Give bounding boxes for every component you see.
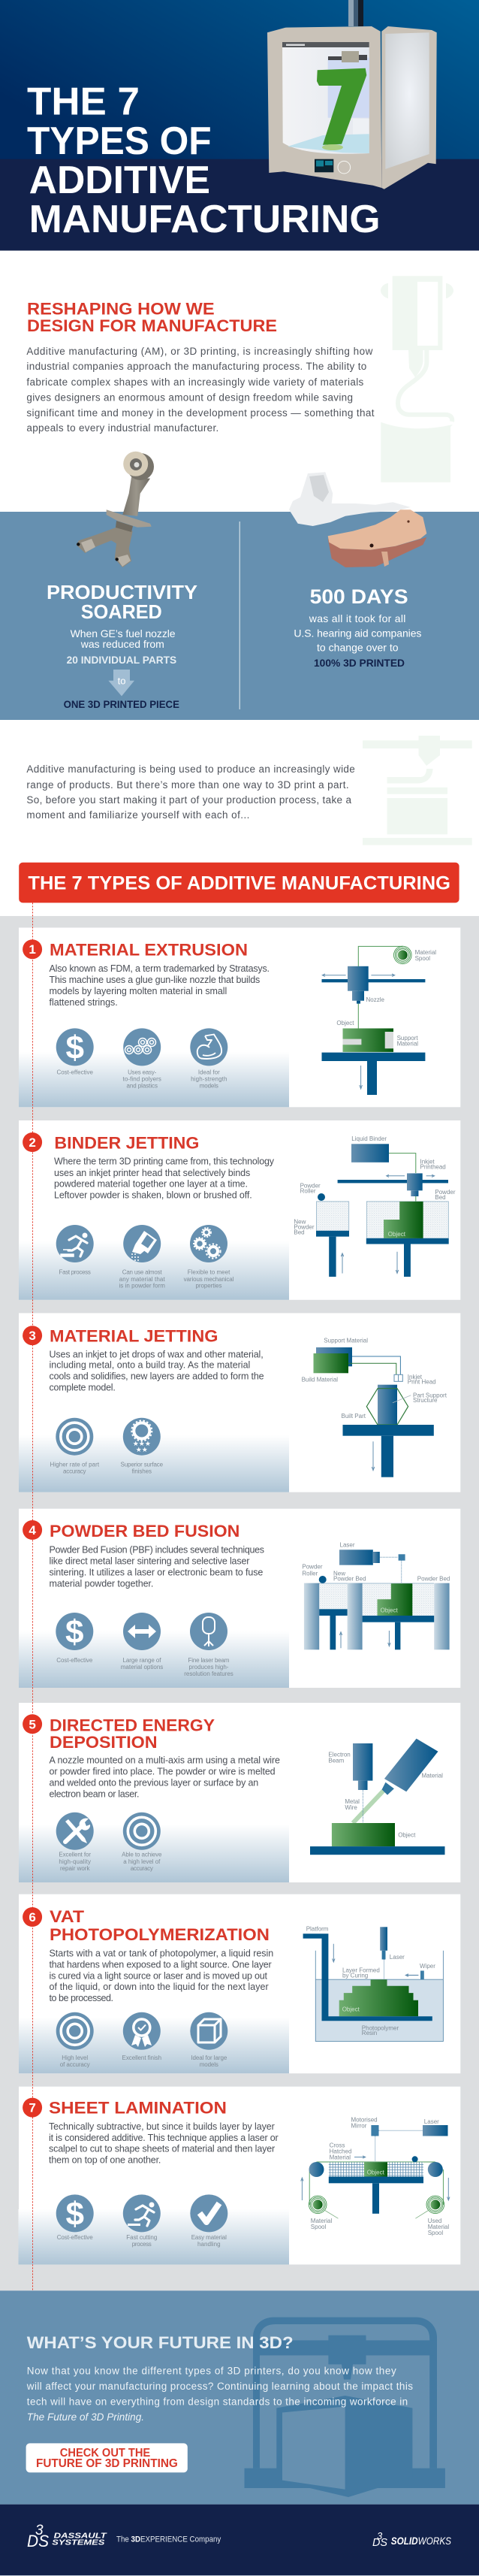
description: powdered material together one layer at a time. xyxy=(54,1179,248,1190)
logo: Dassault Systemes xyxy=(27,2523,108,2550)
number badges xyxy=(23,939,42,2118)
diagram: sheet lamination: Motorised xyxy=(351,2117,378,2124)
diagram: material extrusion: Material xyxy=(415,949,436,956)
icon labels: Fast process xyxy=(59,1269,91,1276)
number badges: 2 xyxy=(29,1135,36,1150)
title: MATERIAL JETTING xyxy=(50,1326,218,1345)
intro paragraph: fabricate complex shapes with an increasingly wide variety of materials xyxy=(26,376,364,388)
text: 500 days xyxy=(294,585,421,669)
text: productivity soared: was reduced from xyxy=(80,638,164,650)
icon labels: Higher rate of part xyxy=(50,1462,100,1468)
diagram: material extrusion: Material xyxy=(397,1040,418,1047)
icon: dollar: $ xyxy=(65,1614,84,1651)
paragraph: The Future of 3D Printing. xyxy=(27,2411,144,2423)
icon labels xyxy=(60,2054,227,2068)
text: 500 days: 500 DAYS xyxy=(310,585,408,608)
icon: laser beam xyxy=(190,1613,227,1650)
description: Uses an inkjet to jet drops of wax and other material, xyxy=(50,1349,264,1359)
icon labels: accuracy xyxy=(63,1468,86,1475)
button: FUTURE OF 3D PRINTING xyxy=(36,2457,178,2470)
logo: SolidWorks: 3 xyxy=(377,2530,383,2541)
description: that hardens when exposed to a light source. One layer xyxy=(50,1960,272,1970)
logo: Dassault Systemes: DASSAULT xyxy=(54,2531,108,2540)
description: Powder Bed Fusion (PBF) includes several techniques xyxy=(50,1545,264,1556)
title: MANUFACTURING xyxy=(29,198,381,241)
description: This machine uses a glue gun-like nozzle that builds xyxy=(50,975,260,985)
icon labels: high-quality xyxy=(59,1858,91,1865)
icon: muscle xyxy=(190,1028,227,1066)
diagram: directed energy deposition: Object xyxy=(398,1832,416,1839)
diagram: material jetting: Inkjet xyxy=(408,1374,423,1380)
icon labels: Ideal for xyxy=(198,1069,220,1076)
title xyxy=(27,80,381,241)
diagram: sheet lamination: Hatched xyxy=(330,2148,351,2154)
description: is cured via a light source or laser and is moved up out xyxy=(50,1970,268,1981)
text: 500 days: U.S. hearing aid companies xyxy=(294,627,421,639)
number badges: 6 xyxy=(29,1910,36,1924)
title: PHOTOPOLYMERIZATION xyxy=(50,1925,270,1944)
description: uses an inkjet printer head that selectively binds xyxy=(54,1168,250,1178)
diagram: powder bed fusion: Powder Bed xyxy=(333,1575,366,1582)
icon labels: Cost-effective xyxy=(57,2234,93,2241)
icon: check xyxy=(190,2194,227,2232)
description: A nozzle mounted on a multi-axis arm using a metal wire xyxy=(50,1755,280,1765)
diagram: powder bed fusion: Roller xyxy=(302,1571,318,1577)
icon: dollar xyxy=(56,2194,94,2233)
diagram: sheet lamination: Laser xyxy=(424,2118,439,2125)
diagram: sheet lamination: Used xyxy=(428,2218,441,2224)
logo: SolidWorks: SOLIDWORKS xyxy=(391,2535,451,2547)
diagram: binder jetting: Roller xyxy=(300,1187,316,1194)
logo: SolidWorks: DS xyxy=(372,2536,387,2549)
text: productivity soared: PRODUCTIVITY xyxy=(47,581,197,603)
icon: dollar: $ xyxy=(65,1029,84,1066)
diagram: powder bed fusion: Laser xyxy=(339,1542,355,1549)
description: Leftover powder is shaken, blown or brushed off. xyxy=(54,1190,252,1201)
icon: surface finish: ★★ xyxy=(136,1446,148,1453)
diagram: sheet lamination: Material xyxy=(330,2154,351,2160)
lead-in paragraph: So, before you start making it part of your production process, take a xyxy=(26,794,351,806)
text: productivity soared xyxy=(47,581,197,710)
title: SHEET LAMINATION xyxy=(49,2098,227,2117)
number badges: 1 xyxy=(29,942,36,957)
icon labels xyxy=(57,2234,227,2248)
heading: reshaping: DESIGN FOR MANUFACTURE xyxy=(27,316,277,335)
icon labels: Fast cutting xyxy=(126,2234,157,2241)
logo: Dassault Systemes: DS xyxy=(27,2532,49,2550)
icon labels: various mechanical xyxy=(184,1276,234,1283)
diagram: vat photopolymerization: Photopolymer xyxy=(362,2024,399,2031)
timeline: dotted line xyxy=(32,903,33,2290)
icon: printer watermark xyxy=(245,2317,445,2497)
icon labels: Uses easy- xyxy=(128,1069,157,1076)
text: productivity soared: When GE’s fuel nozzle xyxy=(71,627,176,639)
diagram: binder jetting: Powder xyxy=(300,1183,321,1189)
description: scalpel to cut to shape sheets of material and then layer xyxy=(49,2144,275,2154)
diagram: binder jetting: Liquid Binder xyxy=(351,1135,387,1142)
description xyxy=(49,2121,279,2166)
description: including metal, onto a build tray. As the material xyxy=(50,1360,250,1371)
diagram: sheet lamination: Material xyxy=(311,2218,332,2224)
diagram: material jetting: Build Material xyxy=(302,1377,338,1383)
intro paragraph: appeals to every industrial manufacturer. xyxy=(26,422,218,434)
card 6: vat photopolymerization xyxy=(19,1894,460,2073)
icon labels xyxy=(59,1269,234,1290)
intro paragraph: industrial companies approach the manufacturing process. The ability to xyxy=(26,361,366,372)
text: 500 days: was all it took for all xyxy=(309,612,405,624)
icon: cube xyxy=(190,2012,227,2050)
icon labels: to-find polyers xyxy=(123,1076,161,1082)
icon: 3D printer with green 7 xyxy=(267,0,437,189)
text: productivity soared: ONE 3D PRINTED PIECE xyxy=(64,699,179,710)
diagram: sheet lamination: Mirror xyxy=(351,2123,367,2130)
paragraph: Now that you know the different types of 3D printers, do you know how they xyxy=(27,2366,396,2377)
icon labels: Large range of xyxy=(123,1657,161,1664)
icon labels: any material that xyxy=(119,1276,165,1283)
intro paragraph xyxy=(26,346,375,434)
diagram: material extrusion: Nozzle xyxy=(366,996,385,1003)
description: like direct metal laser sintering and selective laser xyxy=(50,1556,249,1567)
lead-in paragraph: range of products. But there’s more than one way to 3D print a part. xyxy=(26,779,349,791)
button xyxy=(26,2443,188,2472)
icon labels xyxy=(59,1852,162,1872)
number badges: 5 xyxy=(29,1717,36,1731)
description xyxy=(50,963,270,1008)
icon: polymers xyxy=(123,1028,161,1066)
title: DIRECTED ENERGY xyxy=(50,1716,215,1735)
diagram: sheet lamination: Spool xyxy=(428,2230,443,2236)
icon: surface finish xyxy=(123,1418,161,1456)
icon labels: a high level of xyxy=(123,1858,161,1865)
icon labels: material options xyxy=(121,1664,163,1670)
diagram: binder jetting: Powder xyxy=(435,1189,456,1196)
diagram: powder bed fusion: Powder xyxy=(302,1564,323,1571)
image: fuel nozzle xyxy=(77,452,154,567)
diagram: binder jetting: Bed xyxy=(294,1229,305,1235)
icon labels: and plastics xyxy=(126,1083,158,1090)
description: them on top of one another. xyxy=(49,2155,161,2166)
diagram: material jetting: Built Part xyxy=(341,1413,366,1420)
number badges: 3 xyxy=(29,1329,36,1343)
icon labels: models xyxy=(200,1083,218,1090)
description: it is considered additive. This technique applies a laser or xyxy=(49,2133,279,2143)
diagram: directed energy deposition xyxy=(310,1739,444,1855)
tagline: The 3DEXPERIENCE Company xyxy=(116,2535,221,2544)
paragraph xyxy=(26,2366,413,2423)
diagram: vat photopolymerization: Layer Formed xyxy=(342,1967,380,1974)
icon labels: resolution features xyxy=(184,1670,233,1677)
description: or powder fired into place. The powder or wire is melted xyxy=(50,1766,276,1776)
description xyxy=(50,1545,264,1589)
icon labels: Superior surface xyxy=(120,1462,164,1468)
icon: dollar xyxy=(56,1028,94,1066)
icon labels xyxy=(50,1462,164,1475)
number badges: 7 xyxy=(29,2101,36,2115)
card 7: sheet lamination xyxy=(18,2087,460,2265)
logo: Dassault Systemes: 3 xyxy=(35,2523,44,2538)
panel: statistics xyxy=(0,452,479,720)
diagram: material jetting: Structure xyxy=(413,1397,438,1404)
number badges: 4 xyxy=(29,1523,36,1537)
description: models by layering molten material in small xyxy=(50,986,227,996)
card 5: directed energy deposition xyxy=(19,1703,460,1882)
icon: surface finish: ★★★ xyxy=(133,1440,151,1447)
title: MATERIAL EXTRUSION xyxy=(50,941,248,960)
description: flattened strings. xyxy=(50,997,118,1008)
diagram: powder bed fusion: Powder Bed xyxy=(417,1576,450,1583)
diagram: sheet lamination: Material xyxy=(428,2224,449,2230)
logo: SolidWorks xyxy=(372,2530,451,2549)
description: of the liquid, or down into the liquid for the next layer xyxy=(50,1982,269,1992)
arrow: down xyxy=(108,670,134,696)
title: BINDER JETTING xyxy=(54,1133,199,1153)
diagram: vat photopolymerization: by Curing xyxy=(342,1973,368,1979)
description: electron beam or laser. xyxy=(50,1788,140,1799)
icon labels xyxy=(56,1069,227,1090)
diagram: sheet lamination xyxy=(301,2117,450,2236)
diagram: vat photopolymerization: Object xyxy=(342,2006,360,2013)
icon labels: repair work xyxy=(60,1865,90,1872)
icon labels: Fine laser beam xyxy=(188,1657,230,1664)
icon: tools xyxy=(56,1813,94,1850)
heading: reshaping xyxy=(27,299,277,335)
diagram: binder jetting: Printhead xyxy=(420,1164,446,1171)
diagram: directed energy deposition: Beam xyxy=(328,1757,345,1764)
description: Starts with a vat or tank of photopolymer, a liquid resin xyxy=(50,1948,273,1958)
text: productivity soared: SOARED xyxy=(81,600,162,623)
description: to be processed. xyxy=(50,1993,113,2003)
text: productivity soared: 20 INDIVIDUAL PARTS xyxy=(67,655,176,666)
diagram: vat photopolymerization: Resin xyxy=(362,2030,377,2036)
icon: target xyxy=(123,1813,161,1850)
lead-in paragraph: Additive manufacturing is being used to produce an increasingly wide xyxy=(26,763,355,775)
title: TYPES OF xyxy=(27,119,212,163)
description xyxy=(50,1755,280,1799)
icon: target xyxy=(56,1418,93,1456)
icon labels: produces high- xyxy=(189,1664,229,1670)
footer xyxy=(0,2505,479,2576)
panel: grey background xyxy=(0,916,479,2291)
icon labels xyxy=(56,1657,233,1677)
title xyxy=(50,1716,215,1752)
icon labels: is in powder form xyxy=(119,1283,165,1290)
text: productivity soared: to xyxy=(118,675,125,686)
description: Also known as FDM, a term trademarked by Stratasys. xyxy=(50,963,270,974)
icon: powder nozzle xyxy=(123,1225,161,1262)
icon labels: of accuracy xyxy=(60,2061,90,2068)
icon labels: handling xyxy=(197,2241,221,2248)
icon labels: accuracy xyxy=(131,1865,153,1872)
description xyxy=(50,1349,264,1393)
description: material powder together. xyxy=(50,1579,153,1589)
banner: section title xyxy=(19,863,459,903)
header band xyxy=(0,0,479,251)
diagram: binder jetting: New xyxy=(294,1219,306,1226)
description xyxy=(50,1948,273,2003)
icon labels: Can use almost xyxy=(122,1269,162,1276)
icon labels: Excellent for xyxy=(59,1852,91,1858)
description: and welded onto the previous layer or surface by an xyxy=(50,1777,258,1788)
diagram: material extrusion: Spool xyxy=(415,955,430,962)
diagram: binder jetting: Powder xyxy=(294,1224,315,1231)
icon: nozzle watermark xyxy=(381,276,453,482)
heading: WHAT’S YOUR FUTURE IN 3D? xyxy=(27,2333,294,2352)
icon labels: Able to achieve xyxy=(122,1852,162,1858)
description xyxy=(54,1156,275,1201)
diagram: material jetting: Part Support xyxy=(413,1392,447,1398)
logo: Dassault Systemes: SYSTEMES xyxy=(52,2538,104,2547)
card 1: material extrusion xyxy=(19,927,460,1107)
icon labels: High level xyxy=(62,2054,88,2061)
icon labels: high-strength xyxy=(191,1076,227,1082)
diagram: powder bed fusion xyxy=(302,1542,450,1649)
paragraph: will affect your manufacturing process? Continuing learning about the impact this xyxy=(26,2381,413,2392)
button: CHECK OUT THE xyxy=(60,2447,150,2460)
text: 500 days: 100% 3D PRINTED xyxy=(314,657,405,669)
diagram: vat photopolymerization xyxy=(303,1926,443,2041)
diagram: material jetting: Support Material xyxy=(324,1337,368,1344)
icon labels: Easy material xyxy=(191,2234,227,2241)
title xyxy=(50,1907,270,1944)
text: 500 days: to change over to xyxy=(317,641,399,653)
diagram: vat photopolymerization: Laser xyxy=(390,1954,405,1961)
diagram: material extrusion xyxy=(321,946,436,1095)
icon: runner xyxy=(123,2194,161,2232)
description: sintering. It utilizes a laser or electronic beam to fuse xyxy=(50,1568,263,1578)
diagram: powder bed fusion: Object xyxy=(381,1607,398,1613)
card 2: binder jetting xyxy=(19,1120,460,1300)
description: Technically subtractive, but since it builds layer by layer xyxy=(49,2121,275,2132)
title: POWDER BED FUSION xyxy=(50,1522,240,1540)
description: Where the term 3D printing came from, this technology xyxy=(54,1156,275,1166)
title: DEPOSITION xyxy=(50,1733,158,1752)
icon labels: Flexible to meet xyxy=(188,1269,230,1276)
diagram: directed energy deposition: Electron xyxy=(328,1751,351,1758)
icon: target xyxy=(56,2012,94,2050)
diagram: vat photopolymerization: Wiper xyxy=(420,1963,435,1970)
icon labels: Excellent finish xyxy=(122,2054,161,2061)
card 3: material jetting xyxy=(19,1313,460,1492)
icon labels: Cost-effective xyxy=(56,1657,93,1664)
diagram: directed energy deposition: Metal xyxy=(345,1798,360,1805)
diagram: binder jetting xyxy=(294,1135,456,1277)
icon: runner xyxy=(56,1225,94,1262)
intro paragraph: Additive manufacturing (AM), or 3D printing, is increasingly shifting how xyxy=(26,346,373,357)
image: hearing aid xyxy=(289,472,426,567)
icon: dollar xyxy=(56,1613,93,1651)
description: cools and solidifies, new layers are added to form the xyxy=(50,1371,264,1382)
title: THE 7 xyxy=(27,80,140,124)
heading: reshaping: RESHAPING HOW WE xyxy=(27,299,215,319)
icon labels: models xyxy=(200,2061,218,2068)
diagram: directed energy deposition: Wire xyxy=(345,1804,357,1811)
diagram: material extrusion: Object xyxy=(336,1020,354,1026)
diagram: sheet lamination: Cross xyxy=(330,2142,345,2148)
lead-in paragraph: moment and familiarize yourself with each of... xyxy=(26,809,249,821)
title: VAT xyxy=(50,1907,84,1926)
icon labels: properties xyxy=(195,1283,222,1290)
diagram: powder bed fusion: New xyxy=(333,1570,345,1577)
diagram: binder jetting: Bed xyxy=(435,1194,446,1201)
title: ADDITIVE xyxy=(29,159,210,202)
icon: gears xyxy=(190,1225,227,1262)
diagram: sheet lamination: Spool xyxy=(311,2224,326,2230)
intro paragraph: gives designers an enormous amount of design freedom while saving xyxy=(26,392,353,403)
icon: double arrow xyxy=(123,1613,161,1650)
diagram: sheet lamination: Object xyxy=(367,2169,385,2176)
diagram: directed energy deposition: Material xyxy=(422,1772,443,1779)
banner: section title: THE 7 TYPES OF ADDITIVE MANUFACTURING xyxy=(28,873,450,894)
icon: dollar: $ xyxy=(65,2196,84,2233)
icon labels: process xyxy=(132,2241,152,2248)
icon: rosette xyxy=(123,2012,161,2050)
diagram: material jetting xyxy=(302,1337,447,1477)
paragraph: tech will have on everything from design standards to the incoming workforce in xyxy=(27,2396,408,2408)
diagram: material jetting: Print Head xyxy=(408,1379,436,1386)
diagram: vat photopolymerization: Platform xyxy=(306,1926,329,1933)
icon: printer watermark xyxy=(363,736,472,845)
description: complete model. xyxy=(50,1383,116,1393)
icon labels: Ideal for large xyxy=(191,2054,227,2061)
diagram: binder jetting: Inkjet xyxy=(420,1159,435,1166)
intro paragraph: significant time and money in the development process — something that xyxy=(26,407,375,419)
diagram: binder jetting: Object xyxy=(388,1231,406,1238)
lead-in paragraph xyxy=(26,763,355,821)
icon labels: finishes xyxy=(132,1468,152,1475)
card 4: powder bed fusion xyxy=(19,1509,460,1688)
icon labels: Cost-effective xyxy=(56,1069,93,1076)
panel: future in 3D xyxy=(0,2290,479,2505)
diagram: material extrusion: Support xyxy=(397,1035,418,1042)
